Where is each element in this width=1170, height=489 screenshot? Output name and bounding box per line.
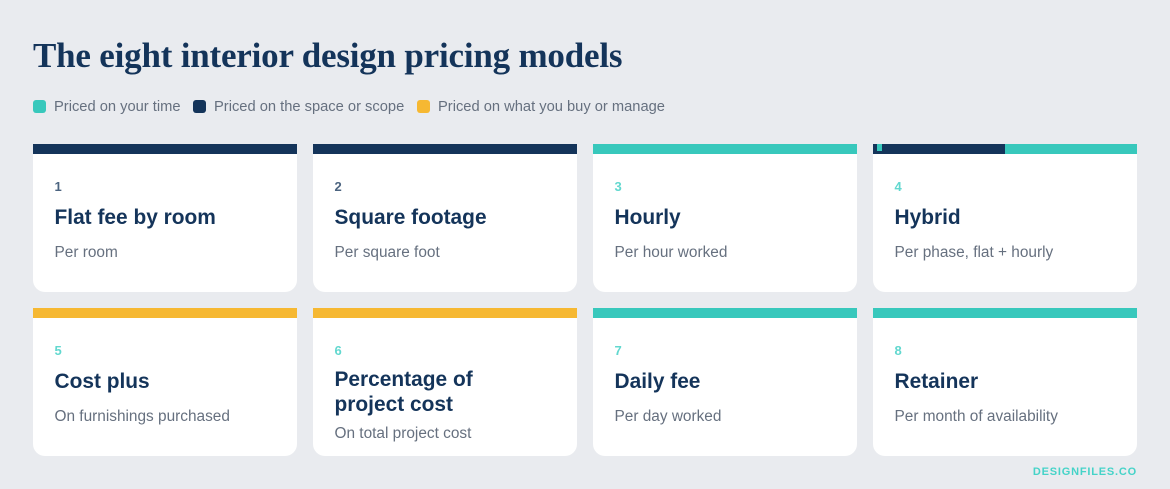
card 2: square footage: Square footage bbox=[334, 206, 487, 229]
card 7: daily fee: Daily fee bbox=[614, 370, 700, 393]
card 4: hybrid: 4 bbox=[894, 179, 902, 194]
card 3: hourly: Per hour worked bbox=[614, 244, 727, 261]
card 8: retainer: Retainer bbox=[894, 370, 978, 393]
card 5: cost plus: 5 bbox=[54, 343, 62, 358]
card 4: hybrid: Hybrid bbox=[894, 206, 961, 229]
card 4: hybrid bbox=[873, 144, 1137, 292]
card 7: daily fee bbox=[593, 308, 857, 456]
card 6: percentage of project cost: 6 bbox=[334, 343, 342, 358]
legend: Priced on your time bbox=[54, 99, 181, 115]
card 5: cost plus bbox=[33, 308, 297, 456]
card 1: flat fee by room bbox=[33, 144, 297, 292]
card 7: daily fee: Per day worked bbox=[614, 408, 721, 425]
title: The eight interior design pricing models bbox=[33, 36, 622, 75]
card 5: cost plus: On furnishings purchased bbox=[54, 408, 230, 425]
card 3: hourly: Hourly bbox=[614, 206, 681, 229]
card 8: retainer bbox=[873, 308, 1137, 456]
legend bbox=[33, 99, 665, 115]
card 2: square footage bbox=[313, 144, 577, 292]
card 2: square footage: Per square foot bbox=[334, 244, 440, 261]
card 6: percentage of project cost: project cost bbox=[334, 393, 453, 416]
legend: Priced on the space or scope bbox=[214, 99, 404, 115]
card 5: cost plus: Cost plus bbox=[54, 370, 150, 393]
card 8: retainer: 8 bbox=[894, 343, 902, 358]
card 8: retainer: Per month of availability bbox=[894, 408, 1058, 425]
card 7: daily fee: 7 bbox=[614, 343, 622, 358]
card 4: hybrid: Per phase, flat + hourly bbox=[894, 244, 1053, 261]
card 3: hourly: 3 bbox=[614, 179, 622, 194]
card 1: flat fee by room: 1 bbox=[54, 179, 62, 194]
legend: Priced on what you buy or manage bbox=[438, 99, 665, 115]
card 6: percentage of project cost: Percentage of bbox=[334, 368, 473, 391]
card 6: percentage of project cost bbox=[313, 308, 577, 456]
card 2: square footage: 2 bbox=[334, 179, 342, 194]
card 6: percentage of project cost: On total project cost bbox=[334, 425, 471, 442]
card 1: flat fee by room: Flat fee by room bbox=[54, 206, 216, 229]
card 3: hourly bbox=[593, 144, 857, 292]
card 1: flat fee by room: Per room bbox=[54, 244, 118, 261]
footer credit: DESIGNFILES.CO bbox=[1033, 466, 1137, 478]
